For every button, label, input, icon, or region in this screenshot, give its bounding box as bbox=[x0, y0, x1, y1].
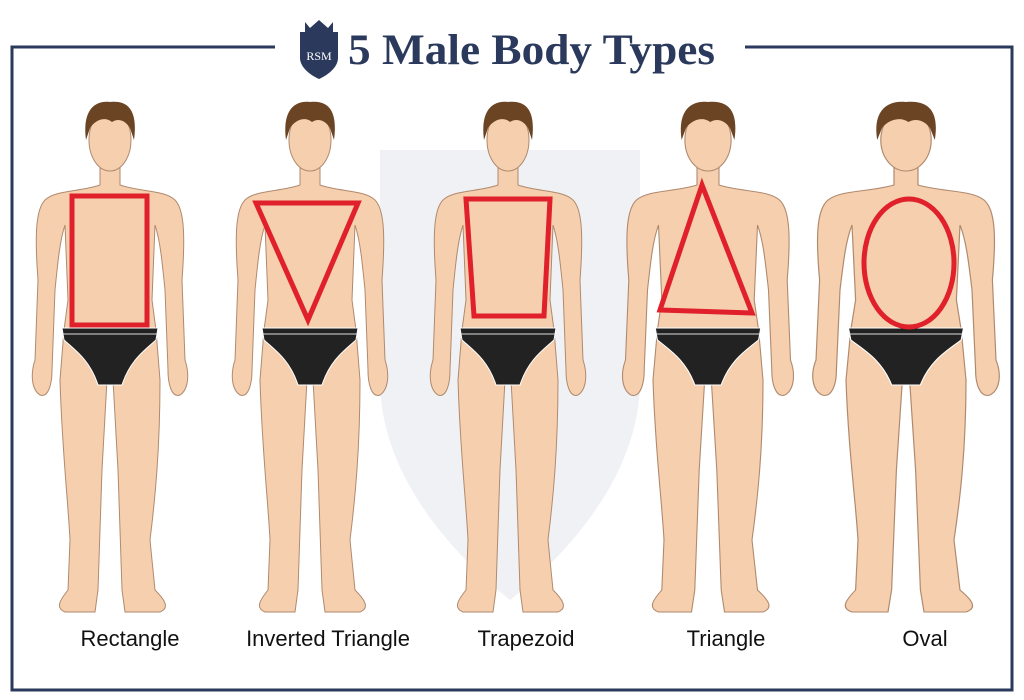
figure: inverted triangle bbox=[232, 102, 388, 612]
labels bbox=[80, 626, 948, 651]
labels: Inverted Triangle bbox=[246, 626, 410, 651]
labels: Rectangle bbox=[80, 626, 180, 651]
shape: rectangle bbox=[72, 196, 147, 325]
shape: inverted triangle bbox=[256, 203, 358, 320]
labels: Oval bbox=[902, 626, 948, 651]
figure: trapezoid bbox=[430, 102, 586, 612]
shape: oval bbox=[864, 199, 954, 327]
labels: Trapezoid bbox=[477, 626, 575, 651]
figure: rectangle bbox=[32, 102, 188, 612]
figure: triangle bbox=[623, 102, 793, 612]
icon: crest logo: RSM bbox=[306, 49, 332, 63]
figure: oval bbox=[813, 102, 999, 612]
labels: Triangle bbox=[687, 626, 765, 651]
watermark crest bbox=[380, 150, 640, 600]
shape: triangle bbox=[660, 185, 752, 313]
icon: crest logo bbox=[300, 20, 338, 79]
title bbox=[300, 20, 715, 79]
shape: trapezoid bbox=[466, 199, 550, 316]
title: 5 Male Body Types bbox=[348, 27, 715, 74]
